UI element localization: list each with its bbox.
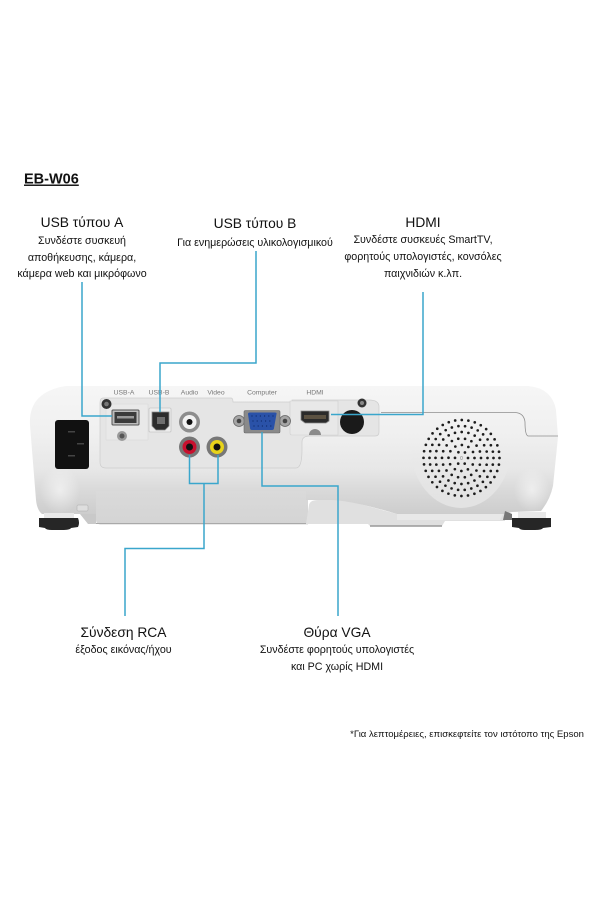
label: USB B: USB τύπου B [214, 216, 296, 231]
label: USB B: Για ενημερώσεις υλικολογισμικού [177, 237, 333, 249]
port panel [100, 398, 379, 468]
projector base tray [96, 490, 308, 524]
port labels: HDMI [306, 390, 324, 396]
label: HDMI: παιχνιδιών κ.λπ. [384, 268, 462, 280]
title: EB-W06 [24, 172, 79, 188]
round black plug [340, 410, 364, 434]
label: USB A: αποθήκευσης, κάμερα, [28, 252, 136, 264]
label: VGA: Συνδέστε φορητούς υπολογιστές [260, 644, 414, 656]
label: HDMI: φορητούς υπολογιστές, κονσόλες [344, 251, 502, 263]
panel screws [102, 398, 366, 441]
audio jack white [179, 412, 200, 432]
left foot [39, 505, 88, 530]
footnote: *Για λεπτομέρειες, επισκεφτείτε τον ιστότοπο της Epson [350, 729, 584, 740]
label: USB A [17, 215, 147, 280]
label: RCA: έξοδος εικόνας/ήχου [75, 644, 172, 656]
connector line: VGA [262, 432, 338, 616]
label: VGA: και PC χωρίς HDMI [291, 661, 383, 673]
label: USB A: USB τύπου A [41, 215, 124, 230]
vga port [234, 410, 290, 433]
hdmi port [301, 411, 329, 423]
label: RCA [75, 625, 172, 656]
port labels: Video [207, 390, 225, 396]
corner highlights [40, 466, 550, 514]
connector line: RCA [125, 455, 218, 616]
usb b port [149, 408, 171, 432]
label: USB B [177, 216, 333, 249]
video jack yellow [206, 436, 228, 458]
label: VGA: Θύρα VGA [303, 625, 371, 640]
audio jack red [179, 436, 200, 458]
label: HDMI [344, 215, 502, 280]
port labels: USB-A [114, 390, 135, 396]
usb a port [112, 410, 139, 425]
port labels: Computer [247, 390, 278, 396]
label: HDMI: HDMI [405, 215, 441, 230]
connector line: USB A [82, 282, 112, 416]
label: USB A: κάμερα web και μικρόφωνο [17, 268, 147, 280]
projector body shell [30, 386, 558, 514]
label: RCA: Σύνδεση RCA [81, 625, 167, 640]
connector line: USB B [160, 251, 256, 412]
port labels: USB-B [149, 390, 170, 396]
port labels: Audio [181, 390, 198, 396]
speaker grille dots [424, 420, 500, 496]
label: VGA [260, 625, 414, 673]
connector line: HDMI [331, 292, 423, 414]
speaker housing [381, 412, 558, 508]
power inlet [55, 420, 89, 469]
port labels [114, 390, 324, 396]
projector [30, 386, 558, 530]
right foot [503, 511, 551, 530]
label: HDMI: Συνδέστε συσκευές SmartTV, [353, 234, 493, 246]
label: USB A: Συνδέστε συσκευή [38, 235, 126, 247]
